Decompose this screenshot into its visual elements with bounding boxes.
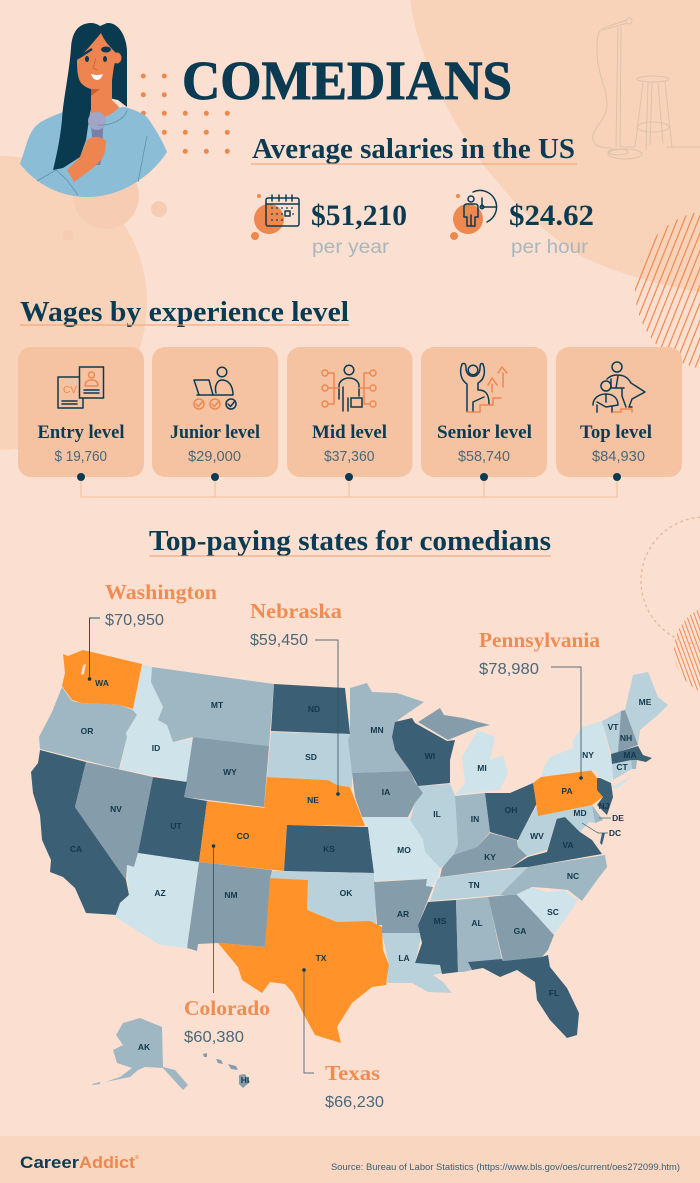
card: entry level: $ 19,760 — [54, 449, 107, 465]
state: CO: CO — [237, 831, 250, 841]
background shape: left circle — [0, 156, 147, 450]
state: IN: IN — [471, 814, 479, 824]
state: UT: UT — [170, 821, 182, 831]
state: MN: MN — [370, 725, 384, 735]
illustration: mic stand and stool — [593, 18, 700, 159]
state: HI: HI — [241, 1075, 249, 1085]
state: MD — [538, 805, 595, 832]
state: WA — [62, 650, 142, 709]
source text: Source: Bureau of Labor Statistics (https://www.bls.gov/oes/current/oes272099.htm) — [331, 1162, 680, 1173]
state: ND — [271, 684, 350, 734]
state: NY — [541, 721, 632, 788]
callout: Texas: Texas — [325, 1061, 380, 1085]
state: IA — [352, 771, 423, 817]
state: OK — [270, 871, 376, 925]
state: MD: MD — [573, 808, 587, 818]
state: PA: PA — [561, 786, 573, 796]
salary per hour: per hour — [511, 237, 589, 258]
state: WA: WA — [95, 678, 109, 688]
callout: Washington — [88, 580, 217, 681]
callout: Pennsylvania: $78,980 — [479, 661, 539, 678]
state: KY — [440, 833, 528, 877]
state: AZ — [115, 853, 199, 948]
state: IL: IL — [433, 809, 441, 819]
state: MO: MO — [397, 845, 411, 855]
state: NH — [618, 710, 638, 752]
state: ND: ND — [308, 704, 320, 714]
callout: Nebraska: Nebraska — [250, 599, 343, 623]
icon: person and clock — [450, 190, 497, 240]
connector lines — [81, 477, 617, 497]
state: KS: KS — [323, 844, 335, 854]
state: ME — [625, 672, 668, 745]
state: NH: NH — [620, 733, 632, 743]
card: mid level — [287, 347, 412, 481]
callout: Washington: $70,950 — [105, 612, 164, 629]
state: WI — [392, 718, 455, 786]
card: entry level: Entry level — [38, 422, 124, 443]
state: GA: GA — [514, 926, 526, 936]
state: KY: KY — [484, 852, 496, 862]
background shape: top right — [410, 0, 700, 292]
callout: Washington: Washington — [105, 580, 217, 604]
footer band — [0, 1136, 700, 1183]
state: TN — [430, 867, 530, 901]
state: NM: NM — [224, 890, 238, 900]
state: NE: NE — [307, 795, 319, 805]
salary per year: per year — [312, 237, 390, 258]
state: MA: MA — [623, 750, 637, 760]
state: NV — [75, 762, 153, 880]
card: senior level — [421, 347, 547, 481]
card: top level: $84,930 — [592, 449, 645, 465]
dot grid — [141, 74, 230, 154]
state: NE — [264, 777, 365, 826]
striped circle: map right — [674, 604, 700, 696]
callout: Texas: $66,230 — [325, 1094, 384, 1111]
state: OH — [485, 783, 537, 840]
callout: Pennsylvania — [479, 628, 601, 780]
state: OR: OR — [81, 726, 93, 736]
state: NY: NY — [582, 750, 594, 760]
state: WI: WI — [425, 751, 435, 761]
callout: Nebraska: $59,450 — [250, 632, 308, 649]
card: mid level: Mid level — [312, 422, 387, 443]
icon: superhero manager and employee — [593, 362, 645, 412]
icon: CV documents: CV — [63, 385, 77, 396]
salary per hour: $24.62 — [509, 199, 594, 232]
state: VA — [510, 817, 605, 868]
state: DE — [592, 805, 603, 823]
logo: CareerAddict: ® — [135, 1154, 139, 1161]
state: SD — [267, 732, 352, 787]
state: NC — [500, 855, 607, 901]
state: HI — [203, 1053, 250, 1088]
state: UT — [138, 777, 207, 862]
heading: wages by experience: Wages by experience level — [20, 296, 349, 328]
state: MI upper — [418, 708, 490, 740]
state: NJ: NJ — [599, 801, 610, 811]
dashed circle — [641, 517, 700, 645]
state: NC: NC — [567, 871, 579, 881]
state: AL — [456, 897, 502, 972]
callout: Colorado — [184, 844, 270, 1046]
state: WV: WV — [530, 831, 544, 841]
state: NJ — [597, 778, 613, 815]
state: CA: CA — [70, 844, 82, 854]
state: FL: FL — [549, 988, 559, 998]
icon: person climbing steps — [461, 364, 507, 412]
card: junior level — [152, 347, 278, 481]
state: FL — [468, 955, 579, 1038]
state: LA — [382, 933, 452, 993]
salary per year — [311, 199, 407, 258]
icon: calendar — [251, 194, 299, 240]
state: MA — [611, 746, 652, 764]
heading: average salaries: Average salaries in the US — [252, 133, 575, 165]
icon: professional with briefcase — [322, 365, 376, 411]
label: DE — [599, 813, 624, 823]
illustration: comedian with microphone — [20, 23, 167, 197]
state: VT — [602, 711, 621, 754]
icon: worker at laptop — [194, 367, 236, 409]
state: SC — [516, 887, 578, 934]
card: top level — [556, 347, 682, 481]
title: COMEDIANS — [182, 50, 512, 111]
state: OH: OH — [505, 805, 517, 815]
state: CT — [612, 760, 632, 780]
salary per hour — [509, 199, 594, 258]
card: top level: Top level — [580, 422, 652, 443]
state: WY — [184, 737, 269, 807]
state: IN — [453, 793, 490, 855]
card: senior level: Senior level — [437, 422, 532, 443]
callout: Nebraska — [250, 599, 343, 796]
state: NV: NV — [110, 804, 122, 814]
state: AR: AR — [397, 909, 409, 919]
state: CT: CT — [616, 762, 628, 772]
state: VA: VA — [562, 840, 574, 850]
label: DC: DC — [609, 828, 621, 838]
state: MS: MS — [434, 916, 447, 926]
callout: Colorado: Colorado — [184, 996, 270, 1020]
state: SC: SC — [547, 907, 559, 917]
state: OR — [39, 687, 137, 769]
state: ID: ID — [152, 743, 160, 753]
state: MT: MT — [211, 700, 224, 710]
decorative circles beneath comedian — [62, 163, 167, 240]
state: LA: LA — [398, 953, 410, 963]
card: mid level: $37,360 — [324, 449, 374, 465]
state: AK — [92, 1018, 188, 1090]
state: TX — [218, 878, 389, 1043]
card: junior level: $29,000 — [188, 449, 241, 465]
state: AL: AL — [471, 918, 483, 928]
state: IA: IA — [382, 787, 390, 797]
state: NM — [187, 862, 272, 951]
state: WY: WY — [223, 767, 237, 777]
state: TN: TN — [468, 880, 480, 890]
state: MS — [415, 900, 458, 974]
callout: Colorado: $60,380 — [184, 1029, 244, 1046]
choropleth map of US states — [31, 650, 668, 1090]
state: IL — [410, 784, 458, 868]
label: DE: DE — [612, 813, 624, 823]
state: ID — [120, 665, 192, 782]
state: MN — [348, 683, 424, 773]
logo: CareerAddict: Career Addict — [20, 1153, 132, 1172]
card: junior level: Junior level — [170, 422, 260, 443]
state: ME: ME — [639, 697, 652, 707]
state: PA — [533, 770, 603, 816]
state: AZ: AZ — [154, 888, 166, 898]
state: GA — [488, 894, 554, 961]
salary per year: $51,210 — [311, 199, 407, 232]
state: OK: OK — [340, 888, 353, 898]
card: senior level: $58,740 — [458, 449, 510, 465]
state: VT: VT — [608, 722, 619, 732]
state: MO — [362, 817, 440, 887]
state: KS — [284, 825, 374, 873]
striped circle: top right — [635, 210, 700, 370]
label: DC — [582, 823, 621, 838]
state: MI — [455, 730, 508, 795]
state: TX: TX — [316, 953, 327, 963]
state: SD: SD — [305, 752, 317, 762]
state: AK: AK — [138, 1042, 151, 1052]
heading: top-paying states: Top-paying states for comedians — [149, 525, 551, 557]
state: MI: MI — [477, 763, 487, 773]
state: WV — [518, 805, 563, 856]
card: entry level — [18, 347, 144, 481]
state: AR — [374, 879, 433, 934]
state: CO — [199, 801, 287, 871]
state: MT — [151, 667, 274, 746]
state: RI — [631, 760, 637, 769]
callout: Pennsylvania: Pennsylvania — [479, 628, 601, 652]
state: CA — [31, 750, 129, 915]
callout: Texas — [302, 968, 384, 1111]
